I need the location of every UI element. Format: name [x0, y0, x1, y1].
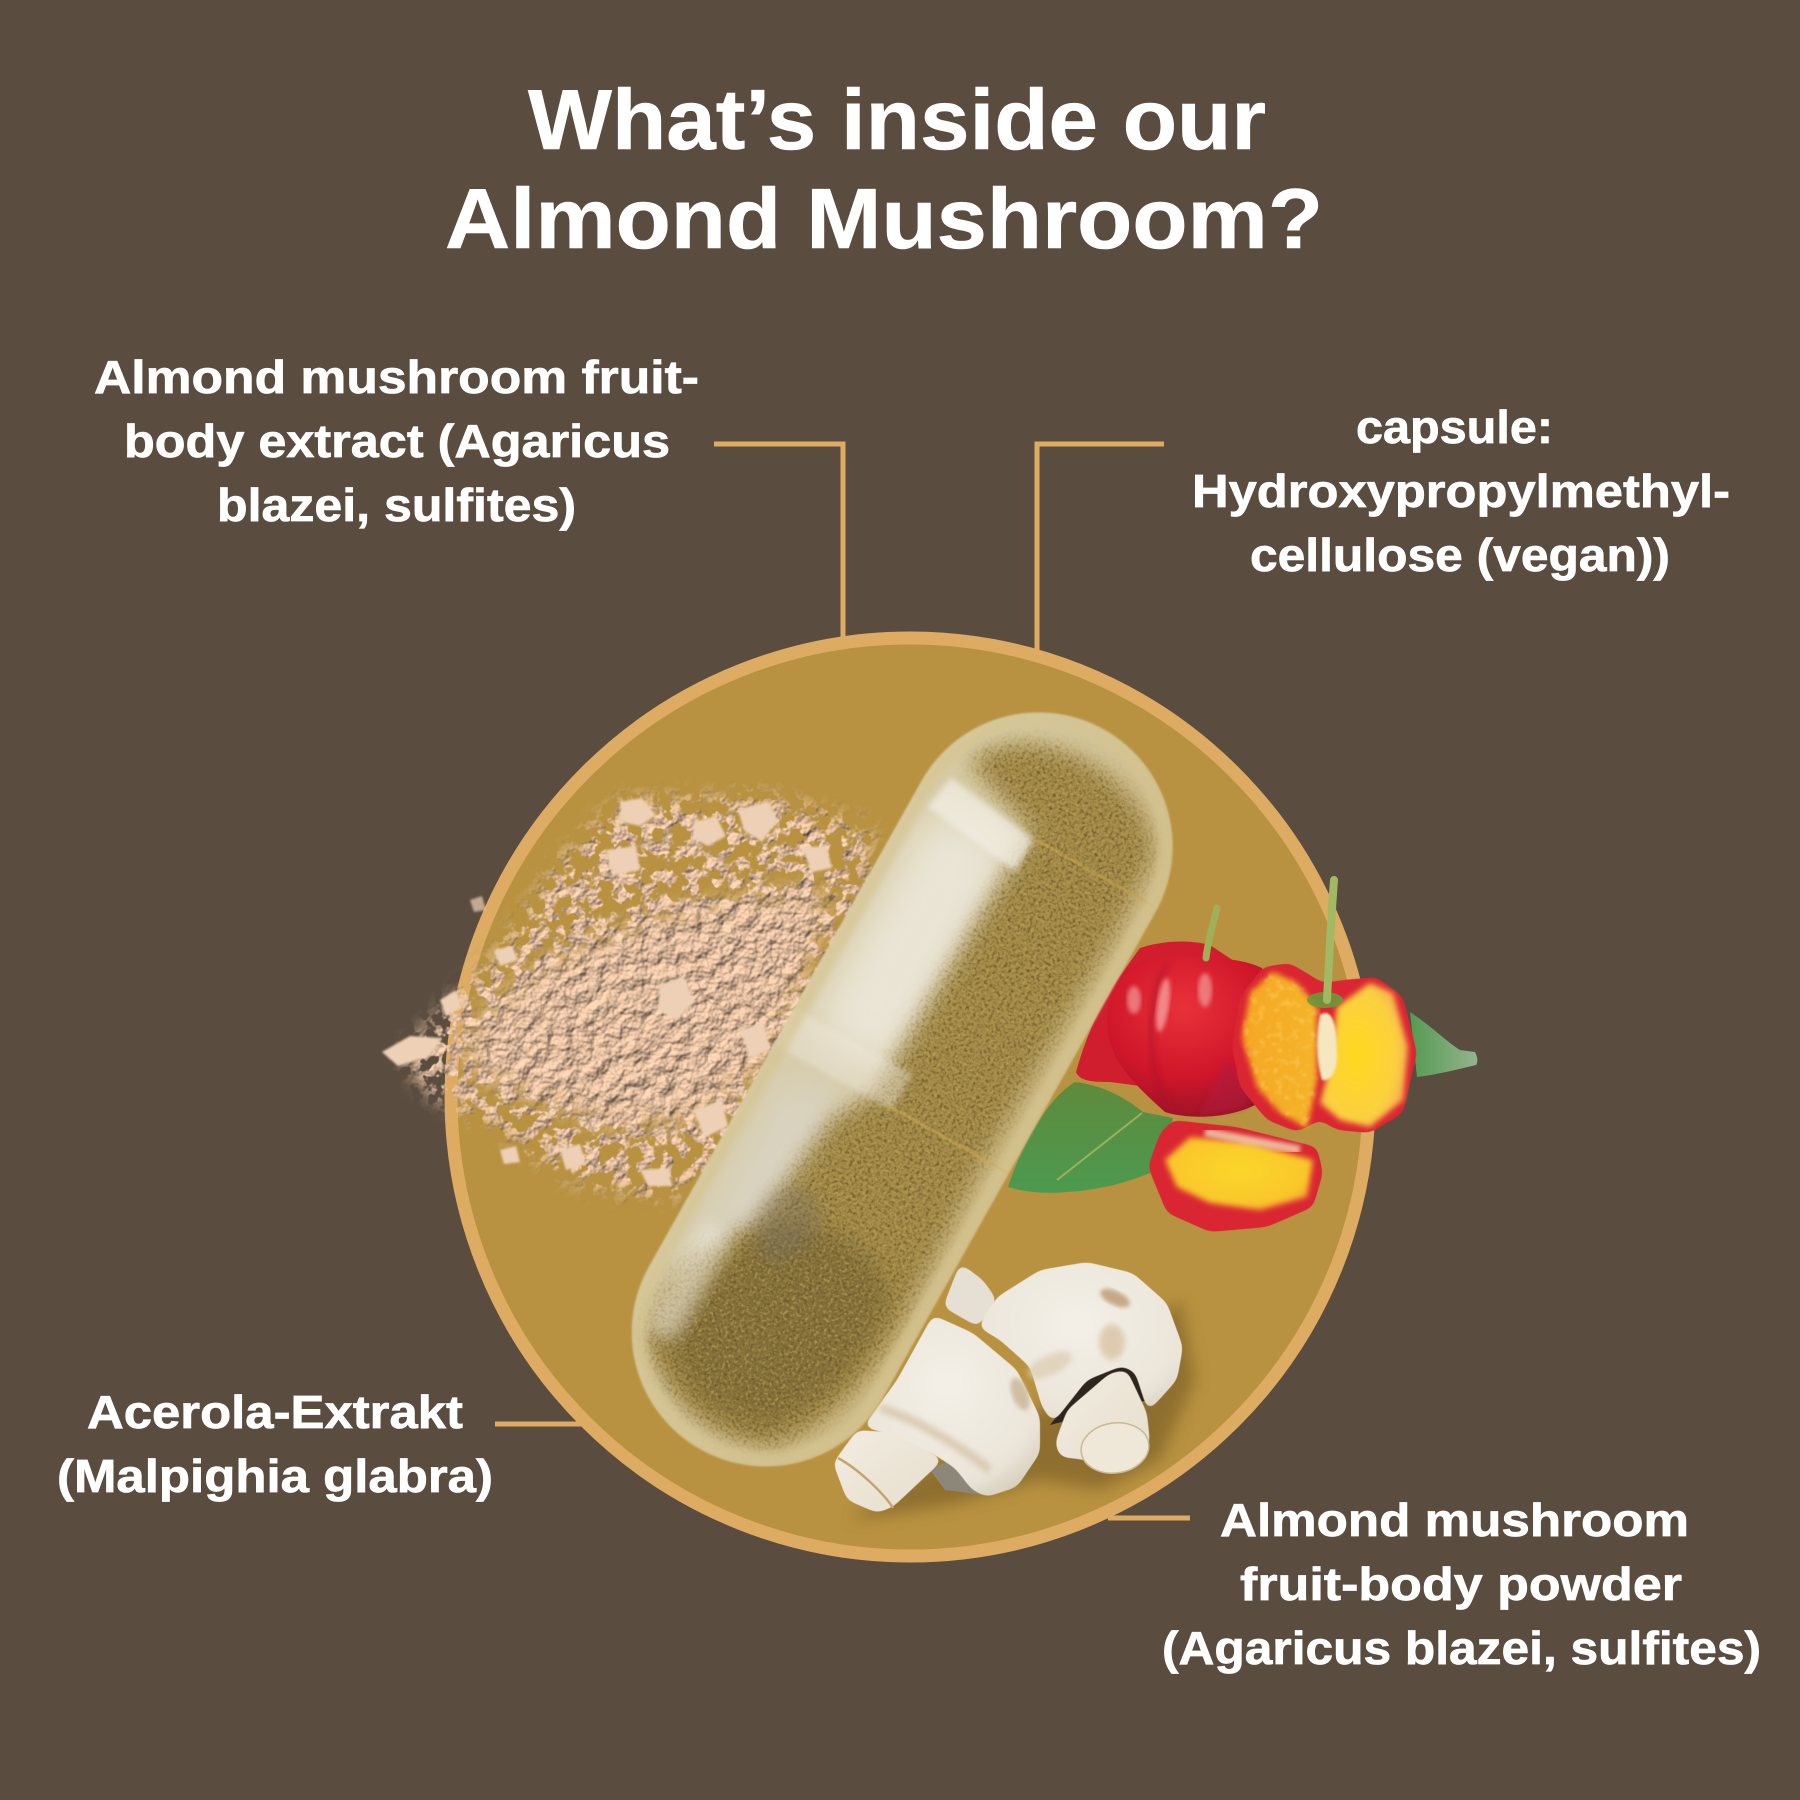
connector: capsule — [1037, 444, 1164, 652]
label: acerola extract: Acerola-Extrakt — [87, 1386, 463, 1438]
right leaf — [1410, 1012, 1477, 1077]
whole fruit stem — [1206, 908, 1217, 958]
label: capsule — [1192, 401, 1730, 581]
title: Almond Mushroom? — [445, 172, 1323, 267]
right mushroom gills — [1050, 1362, 1148, 1425]
lower dark powder — [664, 1222, 895, 1432]
white upper side — [802, 797, 1026, 1084]
illustration: mushrooms — [833, 1262, 1195, 1520]
label: capsule: Hydroxypropylmethyl- — [1192, 465, 1730, 517]
label: almond mushroom fruit-body extract — [94, 351, 699, 531]
right mushroom cap marks — [1099, 1324, 1125, 1360]
cap band — [921, 775, 1040, 871]
left mushroom stem — [833, 1430, 943, 1513]
whole fruit — [1107, 956, 1290, 1117]
title — [445, 73, 1323, 267]
label: almond mushroom fruit-body powder: (Agaricus blazei, sulfites) — [1162, 1622, 1761, 1674]
right flesh — [1320, 983, 1408, 1127]
powder fill — [636, 730, 1161, 1454]
label: almond mushroom fruit-body powder — [1162, 1494, 1761, 1674]
back mushroom — [943, 1263, 997, 1327]
left flesh — [1242, 972, 1317, 1128]
illustration: acerola fruit — [1008, 880, 1477, 1232]
connector: acerola — [495, 1422, 582, 1426]
lower half fruit — [1148, 1120, 1323, 1232]
left mushroom gills — [930, 1460, 985, 1495]
illustration: powder pile — [382, 795, 870, 1200]
grey lower side — [676, 1064, 856, 1258]
label: almond mushroom fruit-body extract: blazei, sulfites) — [217, 479, 576, 531]
title: What’s inside our — [528, 73, 1266, 168]
label: capsule: capsule: — [1356, 401, 1553, 453]
back fruit — [1076, 942, 1240, 1090]
sparse powder crumbs — [400, 795, 870, 1200]
connector: mushroom powder — [1108, 1516, 1190, 1520]
capsule shell — [584, 664, 1221, 1515]
whole fruit lobes — [1151, 965, 1172, 1110]
cap seam — [774, 1008, 912, 1110]
left mushroom cap — [863, 1315, 1040, 1497]
illustration: capsule — [630, 711, 1174, 1468]
label: almond mushroom fruit-body extract: Almond mushroom fruit- — [94, 351, 699, 403]
right mushroom stem — [1055, 1370, 1150, 1473]
label: almond mushroom fruit-body powder: fruit-body powder — [1240, 1558, 1682, 1610]
connector: mushroom extract — [714, 444, 843, 638]
calyx — [1307, 992, 1343, 1008]
left mushroom cap marks — [880, 1408, 990, 1470]
shell rim — [632, 713, 1172, 1466]
lower leaf — [1008, 1082, 1173, 1193]
mushroom shadow — [850, 1300, 1195, 1520]
white reflection — [644, 1219, 735, 1345]
label: almond mushroom fruit-body extract: body extract (Agaricus — [124, 415, 670, 467]
label: acerola extract — [57, 1386, 493, 1502]
right mushroom cap — [978, 1262, 1183, 1423]
halved fruit — [1232, 963, 1417, 1133]
label: acerola extract: (Malpighia glabra) — [57, 1450, 493, 1502]
dense powder body — [460, 890, 830, 1125]
label: capsule: cellulose (vegan)) — [1250, 529, 1670, 581]
powder chunks — [382, 798, 832, 1186]
gold circle — [451, 638, 1369, 1556]
pith — [1317, 1013, 1337, 1080]
label: almond mushroom fruit-body powder: Almond mushroom — [1220, 1494, 1689, 1546]
halved fruit stem — [1327, 880, 1334, 1000]
grey shadow — [752, 1185, 818, 1261]
